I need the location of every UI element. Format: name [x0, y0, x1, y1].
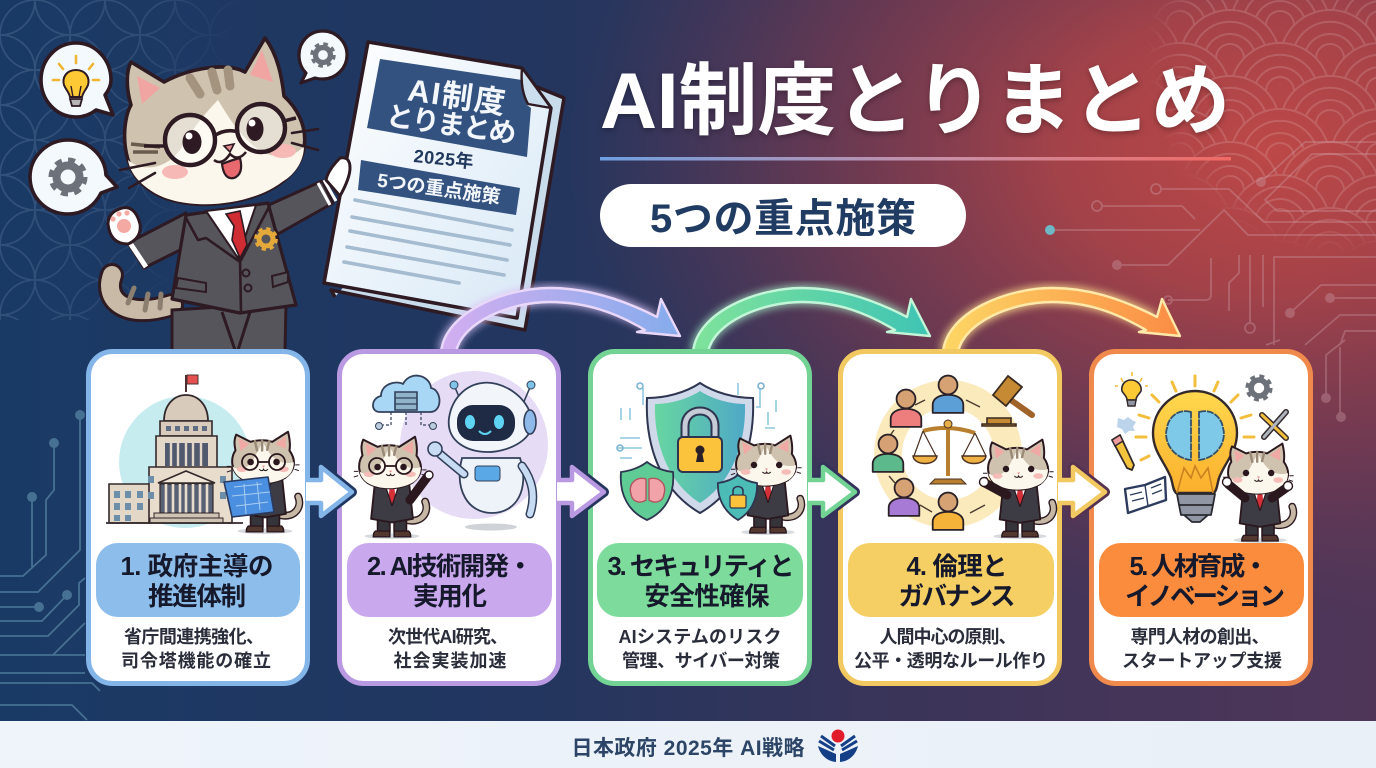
cat left arm and paw: [108, 208, 192, 268]
subtitle pill: [600, 184, 966, 247]
footer bar: [0, 721, 1376, 768]
heading 4: 4. 倫理と: [906, 553, 1008, 581]
cat tail: [110, 275, 172, 310]
heading 5: [1099, 543, 1304, 617]
cat with shield: [718, 436, 802, 535]
heading 4: [848, 543, 1054, 617]
icon: robot and cloud: [373, 371, 548, 530]
heading 3: 安全性確保: [644, 583, 770, 611]
panel 3: security: [590, 352, 810, 684]
icon: light bulb with brain: [1112, 372, 1286, 522]
speech bubble: light bulb: [41, 43, 113, 117]
description 2: [388, 627, 508, 671]
arrow: step 1 to 2: [306, 467, 352, 516]
description 1: [121, 627, 271, 671]
curved arrow 2: [693, 288, 930, 352]
cat right arm: [262, 158, 350, 234]
illustration: document: [324, 42, 564, 330]
description 2: 次世代AI研究、: [388, 627, 508, 647]
heading 5: イノベーション: [1125, 583, 1285, 611]
icon: national diet building: [106, 375, 251, 528]
arrow: step 2 to 3: [557, 467, 604, 516]
arrow: step 4 to 5: [1058, 467, 1105, 516]
illustration: document: とりまとめ: [384, 100, 518, 149]
heading 1: 1. 政府主導の: [120, 553, 274, 581]
curved arrow 3: [943, 288, 1180, 352]
description 4: 公平・透明なルール作り: [854, 651, 1048, 671]
description 5: [1122, 627, 1282, 671]
panel 1: government: [88, 352, 308, 684]
heading 1: [96, 543, 300, 617]
description 3: [618, 627, 782, 671]
description 1: 省庁間連携強化、: [124, 627, 264, 647]
panel 2: AI tech: [340, 352, 558, 684]
icon: shields and padlock: [617, 383, 776, 520]
heading 5: 5. 人材育成・: [1130, 553, 1268, 581]
heading 3: 3. セキュリティと: [608, 553, 794, 581]
icon: people ring, scales, gavel: [873, 376, 1032, 530]
subtitle pill: 5つの重点施策: [650, 197, 916, 241]
description 3: 管理、サイバー対策: [622, 650, 780, 671]
footer bar: 日本政府 2025年 AI戦略: [572, 737, 804, 760]
description 5: 専門人材の創出、: [1130, 627, 1270, 647]
cat pointing: [354, 437, 433, 539]
curved arrow 1: [441, 288, 680, 352]
speech bubble: gear left: [30, 140, 117, 214]
logo emblem: [818, 730, 858, 762]
illustration: document: AI制度: [406, 72, 507, 121]
title: AI制度とりまとめ: [600, 56, 1230, 145]
description 4: 人間中心の原則、: [880, 627, 1016, 647]
cat cheering: [1222, 444, 1294, 543]
heading 1: 推進体制: [148, 583, 246, 611]
heading 2: 実用化: [413, 583, 487, 611]
description 3: AIシステムのリスク: [618, 627, 782, 647]
illustration: main cat in suit: [108, 38, 350, 352]
panel 5: talent: [1092, 352, 1310, 684]
heading 3: [597, 543, 803, 617]
illustration: document: 2025年: [413, 145, 475, 172]
heading 2: 2. AI技術開発・: [367, 553, 533, 581]
description 2: 社会実装加速: [394, 651, 506, 671]
arrow: step 3 to 4: [808, 467, 855, 516]
description 4: [854, 627, 1048, 671]
cat with glasses and blueprint: [224, 432, 300, 534]
heading 2: [347, 543, 552, 617]
heading 4: ガバナンス: [898, 583, 1016, 611]
description 5: スタートアップ支援: [1122, 651, 1282, 671]
description 1: 司令塔機能の確立: [121, 651, 271, 671]
cat jacket: [172, 203, 296, 313]
panel 4: ethics: [840, 352, 1060, 684]
cat presenting: [980, 440, 1054, 539]
illustration: document: 5つの重点施策: [376, 170, 502, 209]
cat head: [120, 38, 318, 204]
speech bubble: gear top: [299, 31, 347, 83]
